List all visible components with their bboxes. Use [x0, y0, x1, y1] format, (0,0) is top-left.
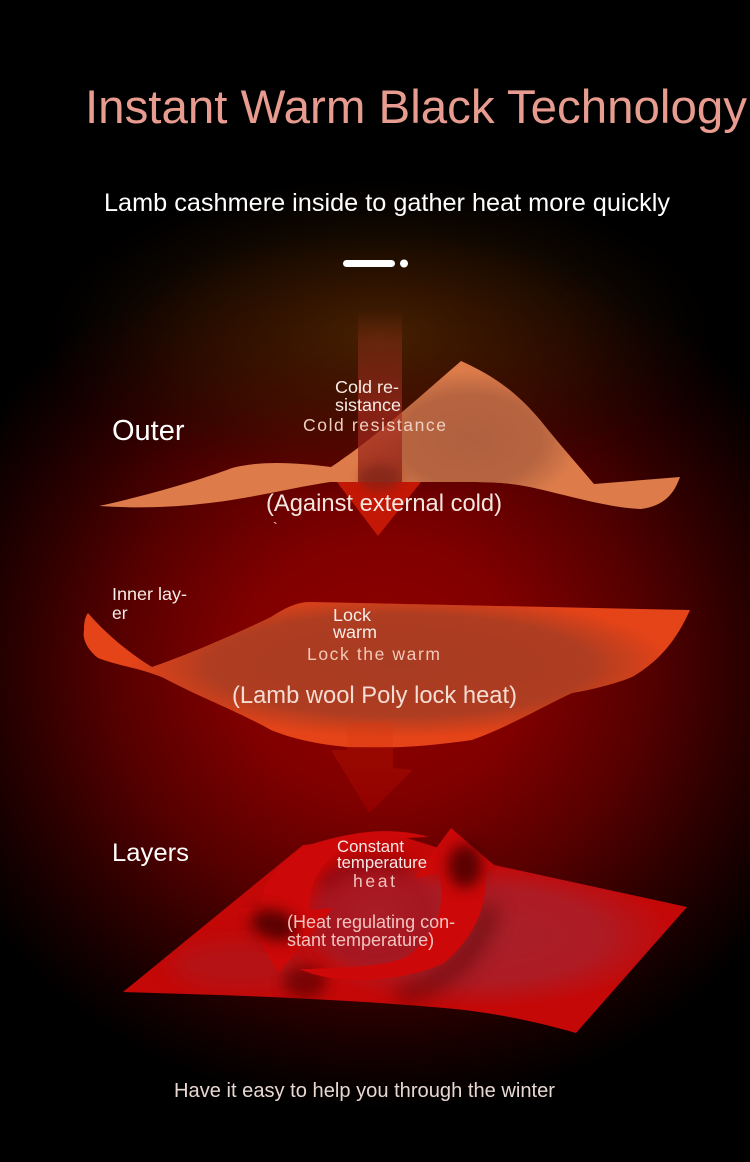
panel: outer layer	[99, 310, 680, 536]
label: constant temperature heat: temperature	[337, 853, 427, 872]
fabric shape: outer layer	[99, 360, 680, 509]
arrow: heat moving downward	[331, 722, 413, 813]
label: inner layer	[112, 584, 187, 623]
caption: heat regulating constant temperature: (Heat regulating con-	[287, 912, 455, 932]
subtitle: Lamb cashmere inside to gather heat more quickly	[104, 189, 670, 217]
label: lock warm: Lock	[333, 605, 371, 625]
caption: heat regulating constant temperature: stant temperature)	[287, 930, 434, 950]
label: inner layer: Inner lay-	[112, 584, 187, 604]
arrow: cold moving downward	[337, 310, 421, 536]
label: constant temperature heat	[337, 837, 427, 891]
decorative pill and dot marker	[343, 260, 408, 268]
arrow: upper left curve	[240, 831, 429, 973]
label: Layers: Layers	[112, 839, 189, 867]
panel: base layer	[112, 828, 687, 1033]
caption: lamb wool poly lock heat: (Lamb wool Poly lock heat)	[232, 682, 517, 709]
label: constant temperature heat: heat	[353, 871, 395, 891]
caption: against external cold: (Against external cold)	[266, 490, 502, 517]
label: inner layer: er	[112, 603, 128, 623]
label: lock warm	[307, 605, 440, 664]
label: lock warm: Lock the warm	[307, 644, 440, 664]
label: cold resistance: Cold re-	[335, 377, 399, 397]
footer line: Have it easy to help you through the winter	[174, 1079, 555, 1102]
label: cold resistance: sistance	[335, 395, 401, 415]
icon: circular arrows	[240, 828, 494, 980]
label: Outer: Outer	[112, 415, 185, 447]
stray mark: `	[273, 519, 278, 535]
label: cold resistance: Cold resistance	[303, 415, 446, 435]
label: cold resistance	[303, 377, 446, 435]
fabric shape: base layer	[123, 836, 687, 1033]
label: constant temperature heat: Constant	[337, 837, 404, 856]
panel: inner layer	[84, 584, 690, 813]
shaded arrow folds	[247, 844, 482, 946]
cast shadow of lower arrow	[397, 905, 490, 996]
arrow: lower right curve	[299, 828, 494, 980]
caption: heat regulating constant temperature	[287, 912, 455, 950]
title: Instant Warm Black Technology	[85, 81, 747, 134]
fabric shape: inner layer	[84, 590, 690, 750]
label: lock warm: warm	[332, 622, 377, 642]
